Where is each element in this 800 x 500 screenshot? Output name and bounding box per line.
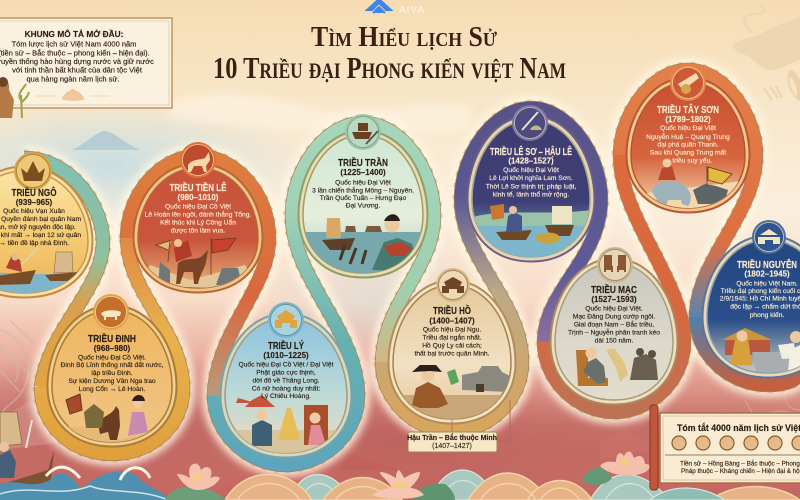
panel: Triều Lê Sơ: (1428–1527) [508, 156, 554, 166]
scene: Ho Quy Ly and citadel [402, 365, 510, 419]
panel: Triều Hồ: Hồ Quý Ly cải cách; [422, 340, 482, 350]
panel: Triều Đinh: Sự kiện Dương Vân Nga trao [68, 378, 156, 385]
title: 10 Triều đại Phong kiến việt Nam [213, 50, 566, 85]
panel: Triều Lê Sơ: TRIỀU LÊ SƠ – HẬU LÊ [490, 145, 572, 158]
icon: citadel [268, 302, 304, 338]
panel: Triều Tiền Lê: Kết thúc khi Lý Công Uẩn [160, 218, 236, 226]
panel: Triều Lê Sơ: kinh tế, lãnh thổ mở rộng. [493, 190, 569, 198]
panel: Triều Mạc: Mạc Đăng Dung cướp ngôi. [573, 314, 655, 320]
icon: cannon [670, 65, 706, 101]
panel: Triều Hồ: Quốc hiệu Đại Ngu. [423, 324, 481, 334]
panel: intro: qua hàng ngàn năm lịch sử. [26, 74, 120, 84]
panel: Triều Ngô: → tiền đề lập nhà Đinh. [0, 238, 69, 247]
panel: Triều Nguyễn: (1802–1945) [744, 270, 790, 278]
panel: intro: (tiền sử – Bắc thuộc – phong kiến – hiện đại). [0, 48, 150, 58]
panel: Triều Tây Sơn: (1789–1802) [665, 115, 711, 124]
panel: Triều Trần: Trần Quốc Tuấn – Hưng Đạo [320, 193, 406, 202]
scene: palace and proclamation [722, 328, 800, 372]
panel: Triều Tiền Lê: được tôn làm vua. [171, 228, 225, 234]
callout: Hậu Trần: Hậu Trần – Bắc thuộc Minh [407, 433, 497, 442]
mountains [0, 131, 660, 470]
panel: Triều Lý: TRIỀU LÝ [268, 339, 304, 352]
logo: AIVA [399, 5, 425, 16]
scene: Mac throne and map [576, 348, 658, 386]
timeline icons [672, 436, 800, 450]
panel: Triều Lý: Phật giáo cực thịnh, [256, 370, 316, 376]
dragon line art lower right [740, 385, 800, 440]
panel: Triều Lê Sơ: Quốc hiệu Đại Việt [503, 165, 559, 174]
icon: sword and turtle [512, 105, 548, 141]
panel: Triều Lý: dời đô về Thăng Long. [252, 376, 320, 384]
panel: Triều Ngô [0, 152, 90, 300]
panel: Triều Nguyễn: phong kiến. [750, 310, 784, 319]
panel: Triều Lê Sơ: Lê Lợi khởi nghĩa Lam Sơn. [489, 174, 573, 182]
waves and boat bottom left [0, 412, 172, 500]
panel: Triều Nguyễn [707, 220, 800, 373]
panel: Triều Đinh: TRIỀU ĐINH [88, 332, 136, 345]
callout: Hậu Trần [407, 400, 510, 452]
scene: Le Loi and turtle [474, 204, 589, 257]
icon: twin thrones [597, 247, 633, 283]
ribbon: serpentine dragon body [24, 70, 800, 465]
scene: naval battle [0, 248, 78, 293]
title: Tìm Hiểu lịch Sử [311, 21, 497, 53]
panel: Triều Nguyễn: Quốc hiệu Việt Nam. [736, 278, 798, 288]
panel: Triều Lý: Lý Chiêu Hoàng. [261, 393, 311, 400]
panel: Triều Hồ [393, 268, 515, 420]
panel: intro: KHUNG MÔ TẢ MỞ ĐẦU: [25, 28, 123, 39]
panel: intro [0, 18, 172, 108]
panel: Triều Mạc: Trịnh – Nguyễn phân tranh kéo [568, 328, 660, 336]
panel: Triều Lê Sơ [470, 105, 592, 260]
panel: Triều Tiền Lê: (980–1010) [178, 193, 219, 202]
panel: Triều Đinh: Quốc hiệu Đại Cồ Việt. [78, 352, 146, 362]
panel: Triều Mạc: (1527–1593) [591, 295, 637, 304]
icon: crown [14, 152, 52, 190]
panel: Triều Tiền Lê: Lê Hoàn lên ngôi, đánh thắng Tống. [145, 210, 251, 218]
panel: Triều Trần [303, 114, 425, 275]
panel: Triều Lý: (1010–1225) [263, 351, 309, 360]
ribbon: serpentine dragon fins glow [24, 70, 800, 465]
seigaiha waves bottom [225, 470, 800, 500]
title [213, 21, 566, 85]
panel: intro: với tinh thần bất khuất của dân tộc Việt [12, 66, 143, 74]
icon: citadel gate [436, 268, 470, 302]
scene: horse rider [148, 238, 248, 288]
callout: Hậu Trần: (1407–1427) [432, 443, 472, 450]
icon: lotus left [165, 463, 226, 500]
scene: general and queen [65, 393, 150, 442]
panel: Triều Lý: Có nữ hoàng duy nhất: [252, 384, 320, 392]
scroll: summary [650, 405, 800, 490]
panel: Triều Đinh: (968–980) [94, 344, 131, 353]
panel: Triều Mạc: dài 150 năm. [595, 338, 633, 344]
panel: Triều Lý [225, 302, 350, 455]
panel: Triều Ngô: (939–965) [16, 198, 53, 207]
panel: Triều Tây Sơn [630, 65, 750, 210]
panel: Triều Tây Sơn: Quốc hiệu Đại Việt [660, 123, 716, 132]
panel: Triều Mạc: Giai đoạn Nam – Bắc triều, [574, 320, 654, 328]
panel: Triều Mạc: TRIỀU MẠC [591, 283, 637, 296]
logo [367, 0, 425, 16]
panel: Triều Tây Sơn: đại phá quân Thanh. [657, 142, 719, 148]
panel: Triều Đinh [50, 294, 172, 445]
panel: Triều Trần: TRIỀU TRẦN [338, 156, 388, 169]
panel: Triều Tây Sơn: Sau khi Quang Trung mất [650, 148, 726, 156]
icon: lotus centre [372, 470, 455, 500]
panel: Triều Tiền Lê: TRIỀU TIỀN LÊ [170, 181, 227, 194]
lotus ornament [36, 89, 110, 100]
panel: Triều Đinh: lập triều Đinh. [91, 368, 133, 377]
icon: palace gate [752, 220, 786, 254]
panel: Triều Tây Sơn: TRIỀU TÂY SƠN [657, 103, 719, 116]
panel: Triều Hồ: TRIỀU HỒ [433, 304, 471, 317]
dragon art top right [732, 4, 800, 100]
scene: elephant and army [646, 158, 738, 208]
panel: Triều Mạc [555, 247, 673, 400]
panel: Triều Trần: (1225–1400) [340, 168, 386, 177]
panel: Triều Hồ: Triều đại ngắn nhất. [422, 332, 482, 342]
panel: Triều Ngô: TRIỀU NGÔ [12, 186, 57, 199]
panel: Triều Ngô: Quốc hiệu Vạn Xuân [3, 206, 65, 215]
panel: intro: Tóm lược lịch sử Việt Nam 4000 năm [12, 40, 136, 48]
panel: Triều Tây Sơn: → triều suy yếu. [664, 156, 712, 164]
panel: Triều Mạc: Quốc hiệu Đại Việt. [585, 304, 643, 312]
panel: Triều Tiền Lê [136, 142, 262, 290]
icon: lotus right [582, 452, 650, 485]
panel: Triều Trần: Đại Vương. [346, 202, 380, 210]
icon: horse [180, 142, 216, 178]
panel: Triều Trần: 3 lần chiến thắng Mông – Nguyên. [312, 186, 414, 194]
scroll roller [650, 405, 658, 490]
scene: pagoda and queen [236, 395, 336, 453]
panel: Triều Tiền Lê: Quốc hiệu Đại Cồ Việt [165, 202, 231, 210]
panel: Triều Trần: Quốc hiệu Đại Việt [335, 178, 391, 186]
panel: Triều Hồ: thất bại trước quân Minh. [414, 348, 490, 358]
icon: child with rice plant [0, 77, 29, 118]
panel: Triều Lê Sơ: Thời Lê Sơ thịnh trị; pháp luật, [486, 184, 576, 190]
icon: junk and sword [345, 114, 381, 150]
dragon line art left [0, 320, 35, 420]
scene: Bach Dang river [303, 214, 425, 275]
icon: buffalo [93, 294, 129, 330]
panel: Triều Đinh: Đinh Bộ Lĩnh thống nhất đất nước, [61, 360, 164, 369]
panel: Triều Lý: Quốc hiệu Đại Cồ Việt / Đại Việt [239, 360, 334, 368]
panel: Triều Đinh: Long Cổn → Lê Hoàn. [79, 385, 145, 393]
panel: Triều Hồ: (1400–1407) [429, 316, 475, 326]
panel: Triều Tây Sơn: Nguyễn Huệ – Quang Trung [646, 132, 730, 141]
